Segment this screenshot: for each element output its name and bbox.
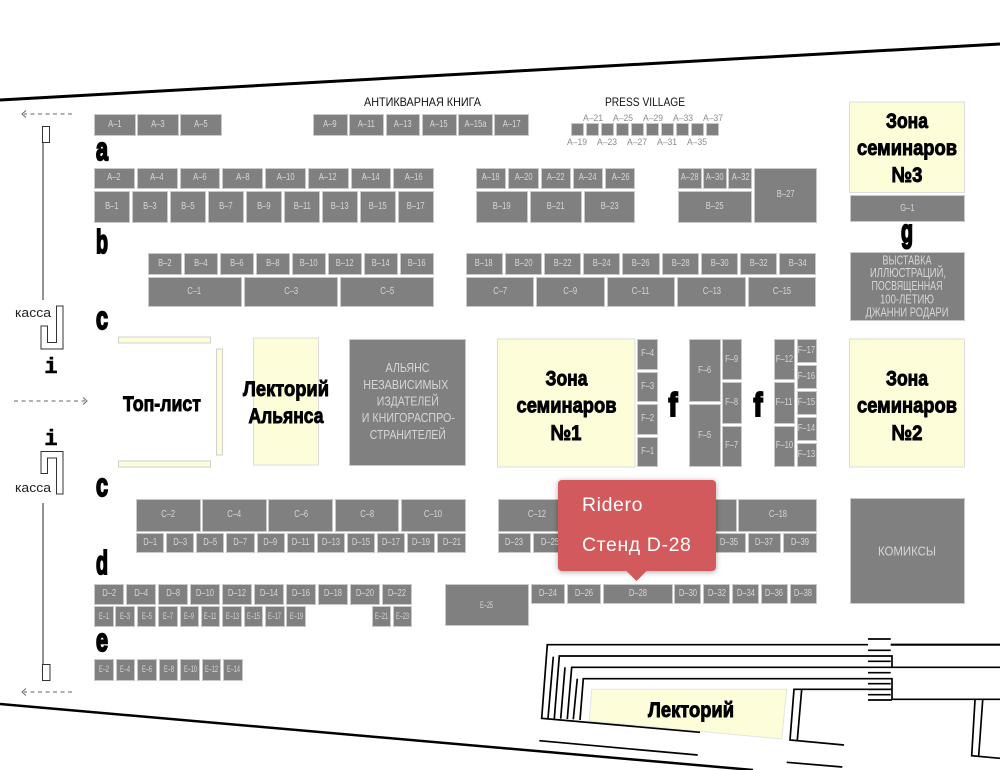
row: C-7 to C-15: C–11 [632, 286, 650, 296]
bottom wall line [0, 704, 753, 770]
column: F-17 to F-13: F–14 [798, 423, 815, 434]
column: F-17 to F-13 [797, 339, 817, 467]
row letter: c upper: c [96, 300, 108, 336]
heading: seminars zone 2: Зона [886, 366, 929, 390]
row: B-19 to B-23: B–23 [601, 200, 618, 212]
column: F-12 to F-10 [774, 339, 795, 467]
lower barrier [42, 503, 50, 680]
row: B-2 to B-16: B–4 [194, 258, 207, 269]
heading: alliance lecture hall [243, 377, 329, 428]
row: D-24 to D-38: D–36 [765, 588, 784, 599]
row: D-23 to D-39: D–39 [791, 537, 809, 548]
row: B-1 to B-17: B–11 [293, 200, 311, 212]
row: D-1 to D-21: D–5 [203, 537, 217, 548]
upper barrier [42, 126, 50, 300]
row: B-19 to B-23: B–19 [493, 200, 511, 212]
row: A-9 to A-17 [313, 114, 529, 136]
column: F-4 to F-1: F–4 [641, 348, 654, 359]
column: F-9 to F-7: F–8 [725, 397, 739, 408]
column: F-4 to F-1: F–3 [641, 381, 654, 392]
row: C-2 to C-10: C–2 [161, 509, 175, 520]
row: D-24 to D-38: D–38 [794, 588, 812, 599]
row: B-2 to B-16: B–8 [266, 258, 279, 269]
column: F-4 to F-1 [637, 339, 658, 467]
row: C-7 to C-15: C–15 [773, 286, 791, 296]
row: C-1 to C-5: C–1 [188, 286, 202, 296]
row: C-7 to C-15: C–9 [563, 286, 577, 296]
row: B-1 to B-17: B–13 [331, 200, 349, 212]
row: B-18 to B-34: B–32 [750, 258, 768, 269]
row: C-7 to C-15 [466, 277, 816, 307]
row: D-2 to D-22: D–20 [356, 588, 374, 599]
row: A-28 to A-32 [678, 168, 752, 189]
arrow: exit top [22, 110, 72, 118]
press village lower labels: A–27 [627, 137, 647, 148]
row: B-18 to B-34: B–22 [554, 258, 571, 269]
row: A-2 to A-16: A–4 [150, 172, 164, 183]
text: alliance of independent publishers: НЕЗАВИСИМЫХ [363, 377, 449, 392]
stand: G-1: G–1 [900, 202, 914, 214]
column: F-9 to F-7: F–9 [725, 354, 739, 365]
column: F-9 to F-7: F–7 [725, 440, 739, 451]
row: D-2 to D-22: D–2 [102, 588, 116, 599]
lecture hall walls [539, 639, 1000, 767]
row: A-18 to A-26: A–22 [547, 172, 565, 183]
row: A-9 to A-17: A–15а [464, 119, 486, 130]
column: F-17 to F-13: F–16 [798, 371, 815, 382]
row: D-2 to D-22: D–10 [196, 588, 214, 599]
zone: alliance lecture hall [254, 338, 318, 465]
row: E-1 to E-19: E–1 [99, 611, 109, 621]
row: B-2 to B-16: B–16 [408, 258, 426, 269]
row: E-2 to E-14: E–6 [142, 664, 152, 674]
row: A-9 to A-17: A–13 [394, 119, 412, 130]
row: A-2 to A-16: A–16 [405, 172, 422, 183]
row: B-18 to B-34: B–26 [632, 258, 650, 269]
column: F-6, F-5 [689, 339, 721, 467]
column: F-12 to F-10: F–11 [776, 397, 793, 408]
row: C-12 to C-18: C–16 [688, 509, 706, 520]
row letter: a: a [96, 131, 108, 167]
press village lower labels [567, 137, 707, 148]
row: D-23 to D-39: D–23 [505, 537, 523, 548]
info letter lower: i [44, 427, 58, 452]
stand: B-27: B–27 [776, 189, 794, 200]
row: A-1 to A-5: A–1 [108, 119, 122, 130]
row: E-21, E-23 [372, 606, 412, 627]
text: comics: КОМИКСЫ [878, 544, 936, 558]
column: F-17 to F-13: F–13 [798, 449, 815, 460]
row: D-1 to D-21: D–21 [442, 537, 461, 548]
row: A-1 to A-5 [94, 114, 222, 136]
row: D-23 to D-39: D–25 [541, 537, 559, 548]
row: B-1 to B-17: B–9 [257, 200, 271, 212]
row: A-2 to A-16 [94, 168, 434, 189]
press village lower labels: A–31 [657, 137, 677, 148]
row: D-1 to D-21 [136, 533, 466, 553]
row letter: f right: f [754, 386, 763, 423]
row: C-12 to C-18: C–18 [769, 509, 787, 520]
column: F-6, F-5: F–6 [698, 364, 711, 376]
row: B-18 to B-34: B–34 [789, 258, 807, 269]
row: C-2 to C-10: C–4 [228, 509, 242, 520]
heading: seminars zone 2: №2 [892, 421, 923, 445]
row: D-2 to D-22: D–14 [260, 588, 278, 599]
heading: seminars zone 1 [516, 366, 616, 445]
heading: alliance lecture hall: Альянса [248, 404, 324, 428]
row: A-1 to A-5: A–5 [194, 119, 208, 130]
row: A-18 to A-26: A–24 [579, 172, 597, 183]
row: C-1 to C-5 [148, 277, 434, 307]
arrow: entrance [14, 398, 87, 404]
row letter: d: d [96, 544, 108, 581]
row: D-24 to D-38: D–34 [736, 588, 755, 599]
row: B-2 to B-16: B–6 [230, 258, 243, 269]
text: alliance of independent publishers [362, 360, 455, 442]
row: E-1 to E-19: E–3 [120, 611, 130, 621]
row: E-1 to E-19: E–17 [268, 611, 281, 621]
zone: seminars 3 [850, 102, 964, 192]
row: D-24 to D-38 [531, 584, 817, 604]
row: E-21, E-23: E–23 [396, 611, 409, 621]
stand: E-25: E–25 [480, 600, 493, 610]
row: E-2 to E-14: E–12 [205, 664, 218, 674]
column: F-9 to F-7 [722, 339, 742, 467]
callout: Ridero stand D-28 [558, 480, 716, 571]
arrow: exit bottom [22, 688, 72, 696]
column: F-17 to F-13: F–15 [798, 397, 815, 408]
row: B-1 to B-17: B–17 [407, 200, 425, 212]
heading: seminars zone 1: семинаров [516, 394, 616, 418]
row: B-2 to B-16: B–10 [300, 258, 318, 269]
text: alliance of independent publishers: ИЗДАТЕЛЕЙ [377, 394, 439, 408]
row: A-9 to A-17: A–15 [430, 119, 448, 130]
text: illustrations exhibition: 100-ЛЕТИЮ [880, 292, 934, 306]
row: E-1 to E-19 [94, 606, 306, 627]
row: A-28 to A-32: A–28 [681, 172, 699, 183]
text: illustrations exhibition: ИЛЛЮСТРАЦИЙ, [870, 265, 946, 280]
row: B-19 to B-23: B–21 [547, 200, 565, 212]
heading: antique book: АНТИКВАРНАЯ КНИГА [364, 95, 481, 109]
row: D-2 to D-22: D–8 [166, 588, 180, 599]
row: B-1 to B-17: B–5 [181, 200, 195, 212]
row: D-1 to D-21: D–19 [412, 537, 430, 548]
row: C-2 to C-10: C–10 [424, 509, 442, 520]
row: A-2 to A-16: A–6 [193, 172, 207, 183]
row: E-1 to E-19: E–19 [290, 611, 303, 621]
row: A-2 to A-16: A–8 [236, 172, 249, 183]
row: D-2 to D-22: D–16 [292, 588, 310, 599]
row: D-1 to D-21: D–13 [322, 537, 340, 548]
row letter: g: g [901, 213, 913, 249]
row: D-24 to D-38: D–32 [708, 588, 726, 599]
press village upper labels: A–25 [613, 113, 633, 124]
text: alliance of independent publishers: И КНИГОРАСПРО- [362, 410, 455, 425]
row: A-18 to A-26: A–18 [482, 172, 500, 183]
row: D-1 to D-21: D–15 [352, 537, 370, 548]
row: D-1 to D-21: D–3 [173, 537, 187, 548]
row: D-2 to D-22: D–22 [388, 588, 407, 599]
heading: seminars zone 3 [857, 109, 957, 187]
column: F-6, F-5: F–5 [698, 430, 711, 440]
row: C-12 to C-18: C–14 [608, 509, 626, 520]
heading: seminars zone 1: Зона [546, 366, 588, 390]
row: D-2 to D-22: D–12 [228, 588, 246, 599]
row letter: b: b [96, 223, 108, 260]
row: C-1 to C-5: C–5 [380, 286, 394, 296]
row: B-2 to B-16: B–14 [372, 258, 390, 269]
row: A-2 to A-16: A–2 [108, 172, 121, 183]
row: C-7 to C-15: C–13 [702, 286, 721, 296]
row: E-2 to E-14: E–4 [120, 664, 130, 674]
press village upper labels: A–21 [583, 113, 603, 124]
row: A-9 to A-17: A–11 [358, 119, 375, 130]
row: D-23 to D-39: D–37 [755, 537, 773, 548]
panel: comics [850, 498, 965, 604]
row: D-1 to D-21: D–7 [234, 537, 247, 548]
row: B-18 to B-34: B–24 [593, 258, 611, 269]
row: D-23 to D-39: D–33 [684, 537, 702, 548]
row: E-1 to E-19: E–11 [204, 611, 217, 621]
column: F-12 to F-10: F–10 [776, 440, 793, 451]
column: F-12 to F-10: F–12 [776, 354, 793, 365]
press village upper labels: A–33 [673, 113, 693, 124]
row: E-2 to E-14: E–14 [227, 664, 240, 674]
row: E-1 to E-19: E–13 [226, 611, 239, 621]
zone: seminars 1 [498, 339, 635, 467]
row: C-12 to C-18: C–12 [528, 509, 546, 520]
text: illustrations exhibition [866, 252, 948, 320]
icon: upper ticket office [41, 306, 63, 349]
text: illustrations exhibition: ВЫСТАВКА [882, 252, 932, 268]
row: E-1 to E-19: E–7 [163, 611, 173, 621]
row: A-18 to A-26 [476, 168, 635, 189]
row: A-9 to A-17: A–9 [324, 119, 337, 130]
row: B-18 to B-34: B–18 [475, 258, 493, 269]
row: C-1 to C-5: C–3 [284, 286, 298, 296]
row: E-2 to E-14: E–2 [99, 664, 109, 674]
row letter: f left: f [668, 386, 678, 423]
row: E-1 to E-19: E–5 [142, 611, 152, 621]
row: C-2 to C-10 [136, 499, 466, 532]
row: E-1 to E-19: E–9 [184, 611, 194, 621]
heading: seminars zone 1: №1 [550, 421, 582, 445]
heading: seminars zone 3: №3 [892, 163, 923, 187]
callout: Ridero stand D-28: Ridero [582, 494, 643, 516]
press village lower labels: A–35 [687, 137, 707, 148]
row: B-2 to B-16: B–2 [158, 258, 171, 269]
heading: alliance lecture hall: Лекторий [243, 377, 329, 401]
row: D-1 to D-21: D–9 [264, 537, 278, 548]
row: D-2 to D-22: D–4 [134, 588, 148, 599]
row: A-18 to A-26: A–26 [611, 172, 629, 183]
row: D-1 to D-21: D–1 [143, 537, 157, 548]
row: D-23 to D-39 [498, 533, 817, 553]
heading: seminars zone 2 [857, 366, 957, 445]
row: D-24 to D-38: D–28 [628, 588, 647, 599]
row: B-2 to B-16 [148, 253, 434, 275]
row: B-1 to B-17: B–3 [143, 200, 157, 212]
heading: lecture hall: Лекторий [648, 698, 734, 722]
lower ticket office label: касса [15, 481, 51, 495]
row: B-1 to B-17: B–7 [219, 200, 233, 212]
text: illustrations exhibition: ДЖАННИ РОДАРИ [866, 304, 948, 320]
callout: Ridero stand D-28: Стенд D-28 [582, 534, 691, 556]
row: A-9 to A-17: A–17 [503, 119, 520, 130]
row: B-18 to B-34: B–20 [514, 258, 532, 269]
row: B-1 to B-17: B–1 [105, 200, 119, 212]
row: B-18 to B-34: B–28 [671, 258, 689, 269]
row: E-1 to E-19: E–15 [247, 611, 260, 621]
column: F-4 to F-1: F–1 [641, 446, 654, 457]
row: D-23 to D-39: D–31 [648, 537, 666, 548]
zone: lecture hall [589, 689, 787, 739]
press village upper labels: A–29 [643, 113, 663, 124]
row letter: e: e [96, 622, 108, 658]
row: C-7 to C-15: C–7 [493, 286, 507, 296]
row: B-18 to B-34 [466, 253, 816, 275]
column: F-17 to F-13: F–17 [798, 345, 815, 356]
row: A-28 to A-32: A–30 [706, 172, 724, 183]
row: B-18 to B-34: B–30 [711, 258, 728, 269]
row: C-2 to C-10: C–6 [294, 509, 308, 520]
row: D-1 to D-21: D–17 [382, 537, 400, 548]
row: C-2 to C-10: C–8 [360, 509, 374, 520]
text: illustrations exhibition: ПОСВЯЩЕННАЯ [872, 278, 942, 293]
row: E-2 to E-14 [94, 659, 243, 681]
row: D-24 to D-38: D–24 [539, 588, 557, 599]
row: A-2 to A-16: A–10 [276, 172, 294, 183]
row: press village stands [571, 123, 719, 136]
stand: B-25: B–25 [706, 200, 724, 212]
row: D-2 to D-22: D–18 [324, 588, 342, 599]
text: alliance of independent publishers: СТРАНИТЕЛЕЙ [370, 427, 446, 442]
row: D-1 to D-21: D–11 [292, 537, 310, 548]
heading: seminars zone 3: Зона [886, 109, 929, 133]
row: A-2 to A-16: A–14 [362, 172, 380, 183]
row: A-1 to A-5: A–3 [151, 119, 165, 130]
row: A-2 to A-16: A–12 [319, 172, 337, 183]
row: B-2 to B-16: B–12 [336, 258, 354, 269]
row: B-19 to B-23 [476, 191, 635, 223]
row: B-1 to B-17: B–15 [369, 200, 387, 212]
press village lower labels: A–23 [597, 137, 617, 148]
row: B-1 to B-17 [94, 191, 434, 223]
row: D-24 to D-38: D–30 [679, 588, 697, 599]
row: A-18 to A-26: A–20 [515, 172, 532, 183]
row: E-2 to E-14: E–8 [164, 664, 173, 674]
upper ticket office label: касса [15, 306, 51, 320]
top list shelves [118, 337, 222, 467]
row: A-28 to A-32: A–32 [731, 172, 749, 183]
press village upper labels: A–37 [703, 113, 723, 124]
row: D-23 to D-39: D–35 [720, 537, 738, 548]
zone: seminars 2 [850, 339, 964, 467]
row: D-23 to D-39: D–27 [577, 537, 595, 548]
row: D-24 to D-38: D–26 [575, 588, 593, 599]
text: alliance of independent publishers: АЛЬЯНС [386, 360, 430, 375]
row: D-2 to D-22 [94, 584, 412, 605]
press village lower labels: A–19 [567, 137, 587, 148]
row: D-23 to D-39: D–29 [612, 537, 631, 548]
column: F-4 to F-1: F–2 [641, 413, 654, 424]
heading: seminars zone 3: семинаров [857, 136, 957, 160]
row: E-21, E-23: E–21 [375, 611, 388, 621]
panel: exhibition of illustrations [850, 252, 965, 321]
row: E-2 to E-14: E–10 [184, 664, 197, 674]
icon: lower ticket office [41, 452, 63, 494]
heading: top list: Топ-лист [123, 392, 201, 416]
row letter: c lower: c [96, 467, 108, 503]
press village upper labels [583, 113, 723, 124]
row: C-12 to C-18 [498, 499, 817, 532]
panel: alliance of independent publishers [349, 339, 466, 466]
heading: seminars zone 2: семинаров [857, 394, 957, 418]
info letter upper: i [44, 355, 58, 380]
heading: press village: PRESS VILLAGE [605, 95, 685, 109]
top wall line [0, 44, 1000, 100]
